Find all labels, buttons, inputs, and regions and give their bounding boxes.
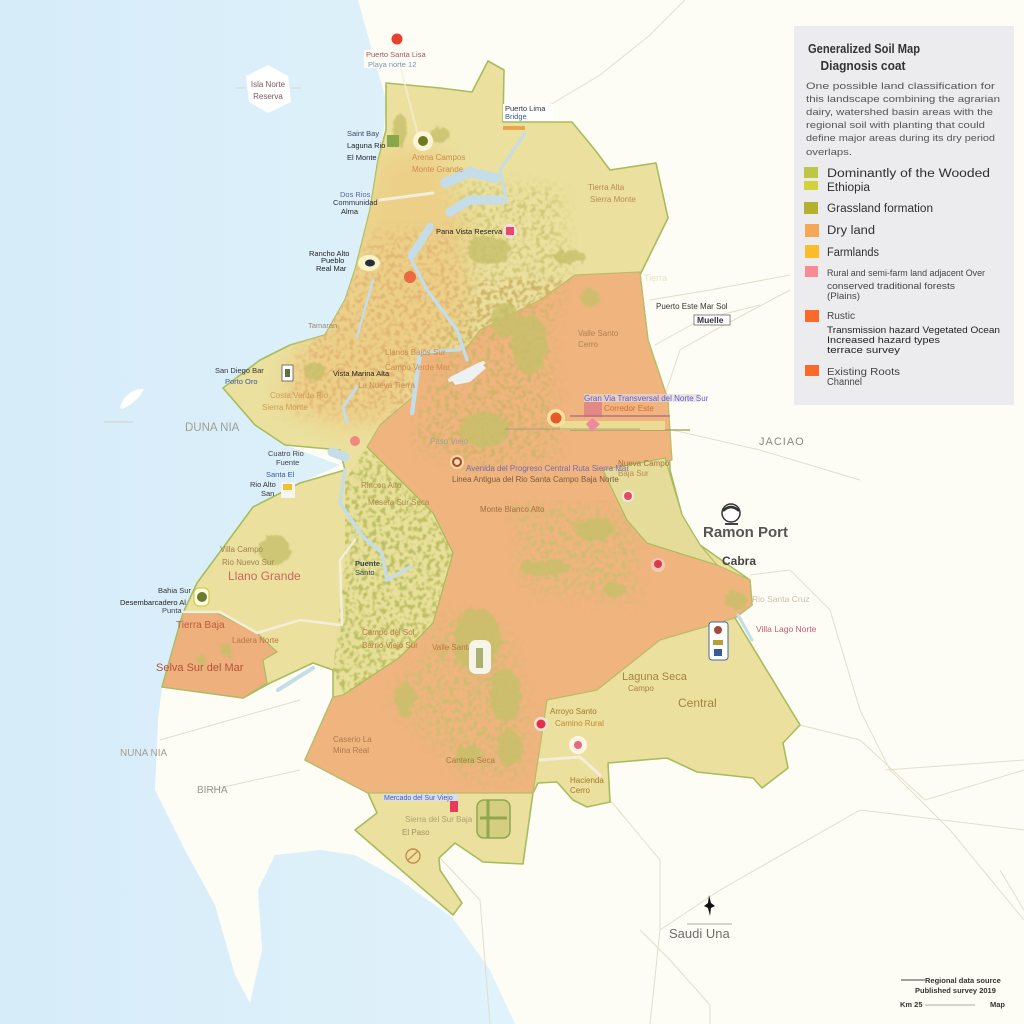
legend description: define major areas during its dry period: [806, 132, 995, 143]
legend description: [806, 80, 1000, 157]
map labels, coastal settlements: [120, 50, 546, 615]
map labels, region names in brown: Laguna Seca: [622, 671, 688, 683]
sea and land place names: BIRHA: [197, 785, 228, 796]
map labels, coastal settlements: Real Mar: [316, 264, 347, 273]
icon: red pin river: [404, 271, 416, 283]
map labels, coastal settlements: Punta: [162, 606, 182, 615]
icon: orange stamp: [406, 849, 420, 863]
map labels, region names in brown: [156, 153, 717, 837]
map labels, coastal settlements: Bahia Sur: [158, 586, 191, 595]
map labels, coastal settlements: Playa norte 12: [368, 60, 416, 69]
panel: orange zone, western coast: [162, 613, 277, 698]
sea and land place names: NUNA NIA: [120, 748, 168, 759]
callout: hexagon island label: Isla Norte: [251, 80, 286, 89]
legend notes: conserved traditional forests: [827, 281, 956, 291]
map labels, region names in brown: Ladera Norte: [232, 636, 279, 645]
map labels, coastal settlements: Saint Bay: [347, 129, 379, 138]
map labels, coastal settlements: Bridge: [505, 112, 527, 121]
icon: badge west: [282, 365, 293, 381]
east coast labels: [644, 273, 817, 634]
map labels, region names in brown: Cerro: [578, 340, 599, 349]
icon: white bridge marker: [450, 362, 486, 385]
panel: orange zone, central: [305, 272, 752, 793]
map labels, region names in brown: Valle Santa: [432, 643, 473, 652]
sea and land place names: [120, 422, 730, 941]
east coast labels: Puerto Este Mar Sol: [656, 302, 728, 311]
icon: eye marker: [358, 255, 380, 271]
map labels, region names in brown: Campo: [628, 684, 654, 693]
legend labels: Grassland formation: [827, 203, 933, 215]
icon: red pin north: [392, 34, 402, 44]
icon: red pin south east: [651, 558, 665, 572]
scale bar and credits: Regional data source: [925, 976, 1001, 985]
legend notes: Increased hazard types: [827, 335, 941, 345]
map labels, coastal settlements: San Diego Bar: [215, 366, 264, 375]
map labels, coastal settlements: Pueblo: [321, 256, 344, 265]
legend swatches: [804, 167, 819, 376]
legend title: Generalized Soil Map: [808, 42, 920, 56]
sea and land place names: Saudi Una: [669, 926, 730, 941]
east coast labels: Muelle: [697, 315, 724, 325]
map labels, region names in brown: Llano Grande: [228, 569, 301, 583]
map labels, coastal settlements: Laguna Rio: [347, 141, 385, 150]
scale bar and credits: Published survey 2019: [915, 986, 996, 995]
central corridor labels: Paso Viejo: [430, 437, 469, 446]
map labels, coastal settlements: Rancho Alto: [309, 249, 349, 258]
callout: hexagon island label: Reserva: [253, 92, 283, 101]
legend description: overlaps.: [806, 146, 852, 157]
map labels, coastal settlements: Cuatro Rio: [268, 449, 304, 458]
map labels, region names in brown: Sierra del Sur Baja: [405, 815, 473, 824]
icon: red tag south: [450, 800, 458, 812]
map labels, region names in brown: Mina Real: [333, 746, 369, 755]
map labels, region names in brown: Sierra Monte: [590, 195, 636, 204]
map labels, coastal settlements: Desembarcadero Al: [120, 598, 186, 607]
scale bar and credits: Km 25: [900, 1000, 923, 1009]
map labels, region names in brown: Campo Verde Mar: [385, 363, 450, 372]
panel: legend: [794, 26, 1014, 405]
map labels, coastal settlements: Tamaran: [308, 321, 337, 330]
map labels, region names in brown: Meseta Sur Seca: [368, 498, 430, 507]
map labels, region names in brown: Hacienda: [570, 776, 604, 785]
central corridor labels: Avenida del Progreso Central Ruta Sierra Mar: [466, 464, 629, 473]
olive vegetation patches: [198, 114, 747, 766]
map labels, coastal settlements: Fuente: [276, 458, 299, 467]
callout: hexagon island label: [236, 65, 301, 113]
map labels, coastal settlements: Santo: [355, 568, 375, 577]
map labels, region names in brown: Camino Rural: [555, 719, 604, 728]
map labels, region names in brown: Costa Verde Rio: [270, 391, 329, 400]
map labels, coastal settlements: Puerto Lima: [505, 104, 546, 113]
scale bar and credits: Map: [990, 1000, 1005, 1009]
legend notes: Channel: [827, 377, 862, 388]
map labels, region names in brown: Caserio La: [333, 735, 372, 744]
east coast labels: Tierra: [644, 273, 667, 283]
icon: sketch of head landmark: [722, 504, 740, 524]
map labels, region names in brown: Monte Grande: [412, 165, 464, 174]
map labels, region names in brown: Barrio Viejo Sur: [362, 641, 418, 650]
map labels, coastal settlements: San: [261, 489, 274, 498]
map labels, coastal settlements: Pana Vista Reserva: [436, 227, 503, 236]
icon: orange ring: [450, 455, 464, 469]
panel: speckled vegetation over orange zone: [380, 280, 650, 790]
icon: pink square: [503, 224, 517, 238]
map labels, region names in brown: Nueva Campo: [618, 459, 670, 468]
roads within the zones: [183, 50, 600, 775]
icon: olive marker: [413, 131, 433, 151]
legend notes: Transmission hazard Vegetated Ocean: [827, 325, 1000, 335]
map labels, region names in brown: La Nueva Tierra: [358, 381, 415, 390]
map labels, coastal settlements: Dos Rios: [340, 190, 371, 199]
east coast labels: Villa Lago Norte: [756, 624, 817, 634]
map labels, region names in brown: Sierra Monte: [262, 403, 308, 412]
icon: small island: [104, 389, 144, 422]
legend notes: [827, 268, 1000, 388]
map labels, region names in brown: Central: [678, 696, 717, 710]
legend title: Diagnosis coat: [820, 59, 906, 73]
map labels, region names in brown: Baja Sur: [618, 469, 649, 478]
central corridor labels: Gran Via Transversal del Norte Sur: [584, 394, 709, 403]
map labels, region names in brown: Villa Campo: [220, 545, 264, 554]
map labels, region names in brown: Rincon Alto: [361, 481, 402, 490]
legend description: dairy, watershed basin areas with the: [806, 106, 993, 117]
legend notes: (Plains): [827, 291, 860, 301]
map labels, coastal settlements: Communidad: [333, 198, 378, 207]
legend notes: Rustic: [827, 311, 855, 322]
legend labels: Farmlands: [827, 247, 879, 259]
legend description: One possible land classification for: [806, 80, 995, 91]
sea and land place names: DUNA NIA: [185, 422, 240, 434]
central corridor labels: Linea Antigua del Rio Santa Campo Baja Norte: [452, 475, 619, 484]
legend labels: Ethiopia: [827, 182, 871, 194]
legend notes: Rural and semi-farm land adjacent Over: [827, 268, 985, 278]
map labels, coastal settlements: El Monte: [347, 153, 377, 162]
legend labels: Dry land: [827, 225, 875, 237]
map labels, coastal settlements: Puerto Santa Lisa: [366, 50, 426, 59]
icon: north arrow: [687, 895, 732, 924]
icon: pink diamond: [586, 418, 600, 432]
panel: yellow eastern wedge: [603, 458, 717, 565]
map labels, region names in brown: Arena Campos: [412, 153, 465, 162]
east coast labels: Cabra: [722, 554, 756, 568]
icon: olive stamp: [477, 800, 510, 838]
map labels, region names in brown: Arroyo Santo: [550, 707, 597, 716]
central corridor labels: Corredor Este: [604, 404, 654, 413]
icon: white tablet: [469, 640, 491, 674]
panel: yellow lobe mottled: [333, 449, 452, 694]
south blue label: Mercado del Sur Viejo: [384, 795, 453, 802]
map labels, region names in brown: Valle Santo: [578, 329, 619, 338]
map labels, region names in brown: Monte Blanco Alto: [480, 505, 545, 514]
east coast labels: Rio Santa Cruz: [752, 594, 810, 604]
rivers and lakes: [278, 133, 752, 690]
icon: red crossing: [350, 436, 360, 446]
map labels, region names in brown: Llanos Bajos Sur: [385, 348, 446, 357]
icon: white pink marker: [569, 736, 587, 754]
map labels, region names in brown: El Paso: [402, 828, 430, 837]
map labels, region names in brown: Cantera Seca: [446, 756, 495, 765]
sea and bay: [0, 0, 515, 1024]
icon: yellow pin: [281, 482, 295, 498]
panel: farmland tint north and west: [280, 150, 580, 430]
map labels, coastal settlements: Santa El: [266, 470, 295, 479]
map labels, coastal settlements: Vista Marina Alta: [333, 369, 390, 378]
map labels, region names in brown: Tierra Baja: [176, 620, 225, 631]
east coast labels: Ramon Port: [703, 524, 788, 541]
icon: orange pin east: [547, 409, 565, 427]
map labels, region names in brown: Tierra Alta: [588, 183, 625, 192]
icon: red pin south: [534, 717, 548, 731]
map labels, region names in brown: Campo del Sol: [362, 628, 415, 637]
map labels, region names in brown: Cerro: [570, 786, 591, 795]
legend labels: Dominantly of the Wooded: [827, 168, 990, 180]
map labels, coastal settlements: Puente: [355, 559, 380, 568]
icon: shield badge: [709, 622, 728, 660]
east coast labels: JACIAO: [759, 436, 805, 448]
legend labels: [827, 168, 990, 259]
blue label strip south: [383, 794, 458, 801]
scale bar and credits: [900, 976, 1005, 1009]
central corridor labels: [430, 394, 709, 484]
legend notes: terrace survey: [827, 345, 901, 355]
legend notes: Existing Roots: [827, 367, 900, 378]
legend description: this landscape combining the agrarian: [806, 93, 1000, 104]
map labels, region names in brown: Rio Nuevo Sur: [222, 558, 274, 567]
icon: green square: [387, 135, 399, 147]
map labels, region names in brown: Selva Sur del Mar: [156, 662, 244, 674]
icon: red pin wedge: [622, 490, 634, 502]
map icons and pins: [194, 34, 740, 863]
legend description: regional soil with planting that could: [806, 119, 985, 130]
icon: yellow-green badge: [194, 588, 209, 606]
icon: north bridge sign: [503, 104, 553, 130]
map labels, coastal settlements: Alma: [341, 207, 359, 216]
map labels, coastal settlements: Porto Oro: [225, 377, 258, 386]
panel: yellow regional zone: [162, 61, 800, 915]
map labels, coastal settlements: Rio Alto: [250, 480, 276, 489]
legend title: [808, 42, 920, 73]
